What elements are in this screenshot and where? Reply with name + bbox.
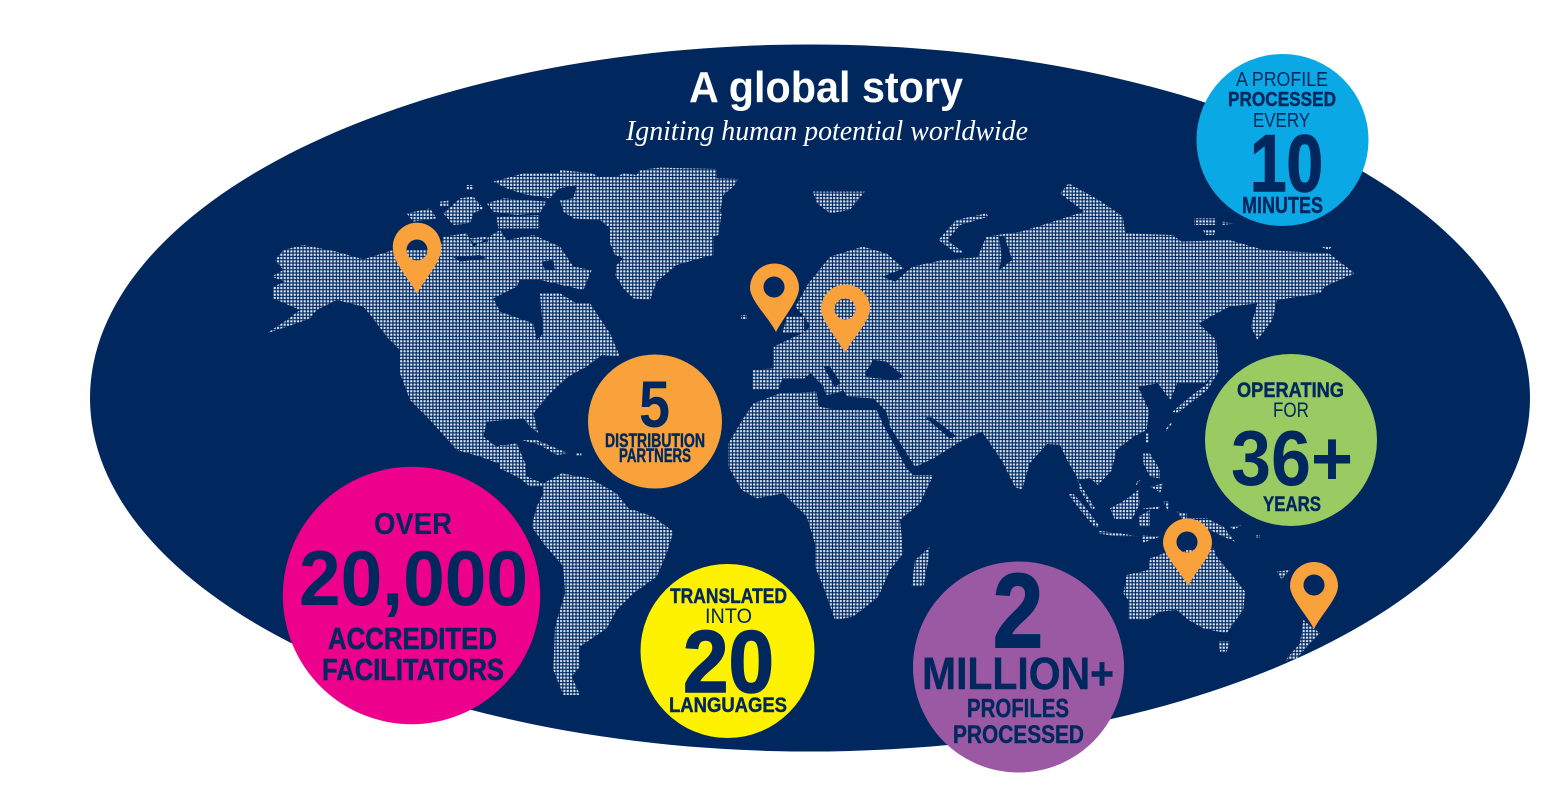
stat: operating for 36+ years: 36+ [1231,414,1353,502]
dotted world map [260,160,1370,700]
stat: 2 million+ profiles processed: PROCESSED [953,721,1084,749]
stat: 2 million+ profiles processed: PROFILES [967,693,1069,723]
stat: a profile processed every 10 minutes [1196,54,1368,226]
stat: operating for 36+ years: YEARS [1263,493,1321,516]
stat: over 20,000 accredited facilitators: FACILITATORS [322,652,504,687]
stat: translated into 20 languages: TRANSLATED [670,585,787,608]
stat: translated into 20 languages [640,564,814,738]
stat: 2 million+ profiles processed: 2 [993,553,1043,670]
stat: over 20,000 accredited facilitators: OVER [374,506,452,541]
stat: a profile processed every 10 minutes: EVERY [1253,110,1310,132]
stat: over 20,000 accredited facilitators: 20,000 [299,534,528,622]
stat: 2 million+ profiles processed [913,553,1124,772]
stat: over 20,000 accredited facilitators [283,467,540,724]
stat: translated into 20 languages: INTO [705,605,752,628]
stat: 5 distribution partners: DISTRIBUTION [605,431,705,452]
stat: a profile processed every 10 minutes: A PROFILE [1236,69,1328,91]
stat: 5 distribution partners [588,354,722,488]
icon: map pin New Zealand [1290,562,1338,629]
stat: translated into 20 languages: LANGUAGES [669,694,787,717]
stat: a profile processed every 10 minutes: MINUTES [1242,192,1323,218]
stat: operating for 36+ years: FOR [1273,399,1309,422]
stat: a profile processed every 10 minutes: 10 [1250,119,1323,209]
stat: 2 million+ profiles processed: MILLION+ [922,648,1114,699]
stat: 5 distribution partners: 5 [639,367,670,441]
stat: translated into 20 languages: 20 [683,612,774,711]
icon: map pin North America [393,223,441,294]
stat: 5 distribution partners: PARTNERS [619,446,691,467]
stat: over 20,000 accredited facilitators: ACCREDITED [328,621,497,656]
stat: operating for 36+ years [1205,354,1377,526]
title: A global story [689,63,963,112]
icon: map pin Eastern Europe [821,284,870,353]
stat: operating for 36+ years: OPERATING [1237,379,1344,402]
subtitle: Igniting human potential worldwide [625,116,1028,147]
icon: map pin Western Europe [750,264,799,332]
icon: map pin Australia [1163,518,1212,586]
stat: a profile processed every 10 minutes: PROCESSED [1228,89,1336,111]
